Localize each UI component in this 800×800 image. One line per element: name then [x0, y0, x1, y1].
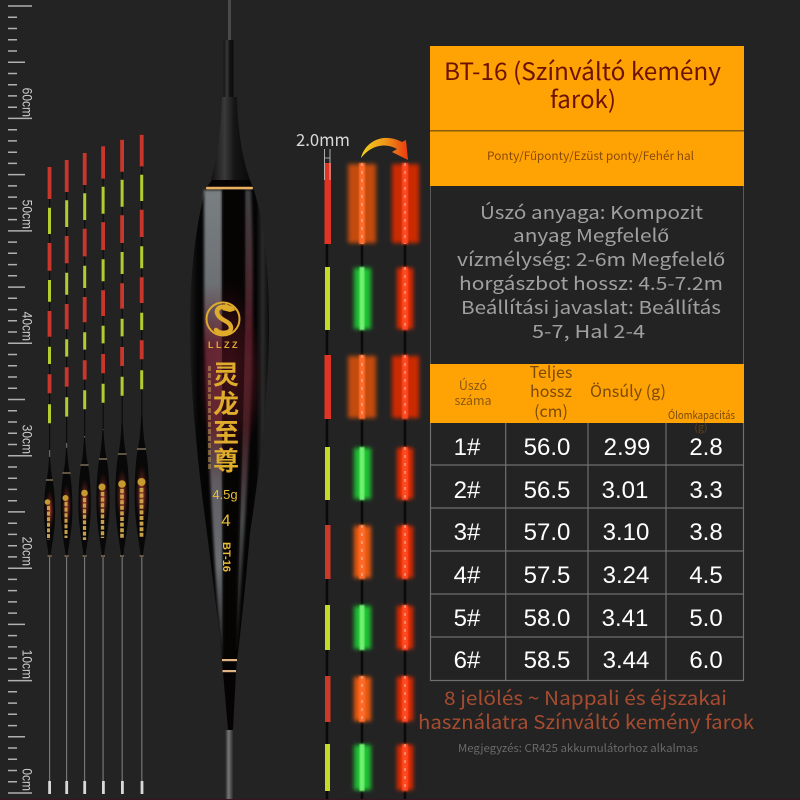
row 6#: 6# [454, 647, 481, 674]
row 2#: 56.5 [524, 477, 570, 504]
small float 6# [135, 134, 149, 794]
table header: (g) [694, 420, 708, 435]
row 4# [454, 562, 723, 589]
row 2#: 3.3 [689, 477, 723, 504]
float body [190, 180, 269, 730]
row 3#: 57.0 [524, 519, 570, 546]
row 6#: 58.5 [524, 647, 570, 674]
description block: vízmélység: 2-6m Megfelelő [457, 246, 725, 272]
ruler scale: 60cm [19, 88, 35, 117]
fine print strip [208, 366, 211, 471]
ruler scale: 0cm [19, 768, 35, 791]
model marking: BT-16 [220, 542, 232, 572]
large float [190, 0, 269, 800]
table rows [454, 434, 723, 674]
feature caption: 8 jelölés ~ Nappali és éjszakai [444, 684, 727, 711]
row 6# [454, 647, 723, 674]
table header: Teljes [530, 359, 572, 383]
row 1#: 1# [454, 434, 481, 461]
small float 4# [96, 146, 110, 794]
feature caption [418, 684, 755, 735]
right highlight [236, 190, 253, 660]
weight marking: 4.5g [212, 487, 238, 502]
table header: hossz [530, 378, 572, 402]
gold rings on small floats [46, 449, 146, 556]
title banner [430, 46, 744, 186]
ruler scale: 50cm [19, 200, 35, 229]
row 4#: 4.5 [689, 562, 723, 589]
bottom edge line [0, 799, 800, 800]
title banner: farok) [550, 80, 616, 115]
tip width label: 2.0mm [296, 126, 350, 151]
small float 3# [78, 153, 91, 794]
arrow yellow to red [361, 138, 408, 160]
red glow [198, 280, 262, 470]
ruler scale [8, 6, 35, 793]
vertical brand text [213, 355, 239, 478]
neck [211, 97, 250, 180]
spec panel [418, 46, 755, 756]
row 6#: 6.0 [689, 647, 723, 674]
panel side borders [430, 186, 744, 364]
vertical brand text: 龙 [213, 384, 239, 421]
color change columns [296, 126, 419, 800]
lower stem [225, 730, 233, 800]
small float 5# [115, 139, 129, 794]
neck tube [224, 40, 234, 98]
table header: száma [454, 390, 492, 409]
ruler scale: 30cm [19, 425, 35, 454]
ruler scale: 10cm [19, 650, 35, 679]
six floats lineup [44, 134, 149, 794]
small float 2# [61, 160, 72, 794]
small float 1# [44, 167, 55, 794]
column 3: night glow red [392, 163, 419, 791]
description block [457, 199, 725, 344]
table header: Ólomkapacitás [668, 408, 735, 423]
row 1#: 2.8 [689, 434, 723, 461]
ruler scale: 40cm [19, 312, 35, 341]
logo: LLZZ [208, 340, 240, 350]
table header: Önsúly (g) [590, 378, 666, 402]
top ring [206, 187, 253, 189]
row 4#: 4# [454, 562, 481, 589]
row 1# [454, 434, 723, 461]
note: Megjegyzés: CR425 akkumulátorhoz alkalmas [458, 740, 698, 756]
table grid [430, 423, 744, 680]
row 5#: 5# [454, 605, 481, 632]
row 3#: 3# [454, 519, 481, 546]
row 5# [454, 605, 723, 632]
column 1: daylight colors [324, 163, 331, 791]
top stem [228, 0, 231, 42]
column stems [327, 163, 405, 800]
table header: (cm) [534, 398, 568, 422]
row 2#: 3.01 [602, 477, 648, 504]
left highlight [204, 190, 223, 660]
vertical brand text: 尊 [213, 441, 239, 478]
description block: horgászbot hossz: 4.5-7.2m [459, 270, 723, 296]
description block: Úszó anyaga: Kompozit [480, 199, 703, 225]
logo [206, 302, 240, 350]
description block: Beállítási javaslat: Beállítás [461, 294, 721, 320]
row 4#: 57.5 [524, 562, 570, 589]
feature caption: használatra Színváltó kemény farok [418, 708, 755, 735]
target fish: Ponty/Fűponty/Ezüst ponty/Fehér hal [487, 148, 694, 164]
row 6#: 3.44 [603, 647, 649, 674]
tip width bracket [324, 149, 330, 180]
row 5#: 5.0 [689, 605, 723, 632]
vertical brand text: 灵 [213, 355, 239, 392]
description block: 5-7, Hal 2-4 [532, 318, 645, 344]
row 1#: 56.0 [524, 434, 570, 461]
lower rings [222, 659, 237, 672]
center dark band [222, 190, 245, 660]
row 2# [454, 477, 723, 504]
row 3#: 3.8 [689, 519, 723, 546]
description block: anyag Megfelelő [513, 222, 669, 248]
row 3# [454, 519, 723, 546]
table header: Úszó [459, 375, 487, 394]
ruler scale: 20cm [19, 537, 35, 566]
column 2: night glow orange and green [348, 163, 376, 791]
row 2#: 2# [454, 477, 481, 504]
row 5#: 3.41 [602, 605, 648, 632]
row 1#: 2.99 [604, 434, 650, 461]
size marking: 4 [221, 511, 231, 530]
table header [430, 359, 744, 435]
row 5#: 58.0 [524, 605, 570, 632]
row 3#: 3.10 [603, 519, 649, 546]
row 4#: 3.24 [603, 562, 649, 589]
vertical brand text: 至 [213, 413, 239, 450]
title banner: BT-16 (Színváltó kemény [444, 52, 722, 87]
